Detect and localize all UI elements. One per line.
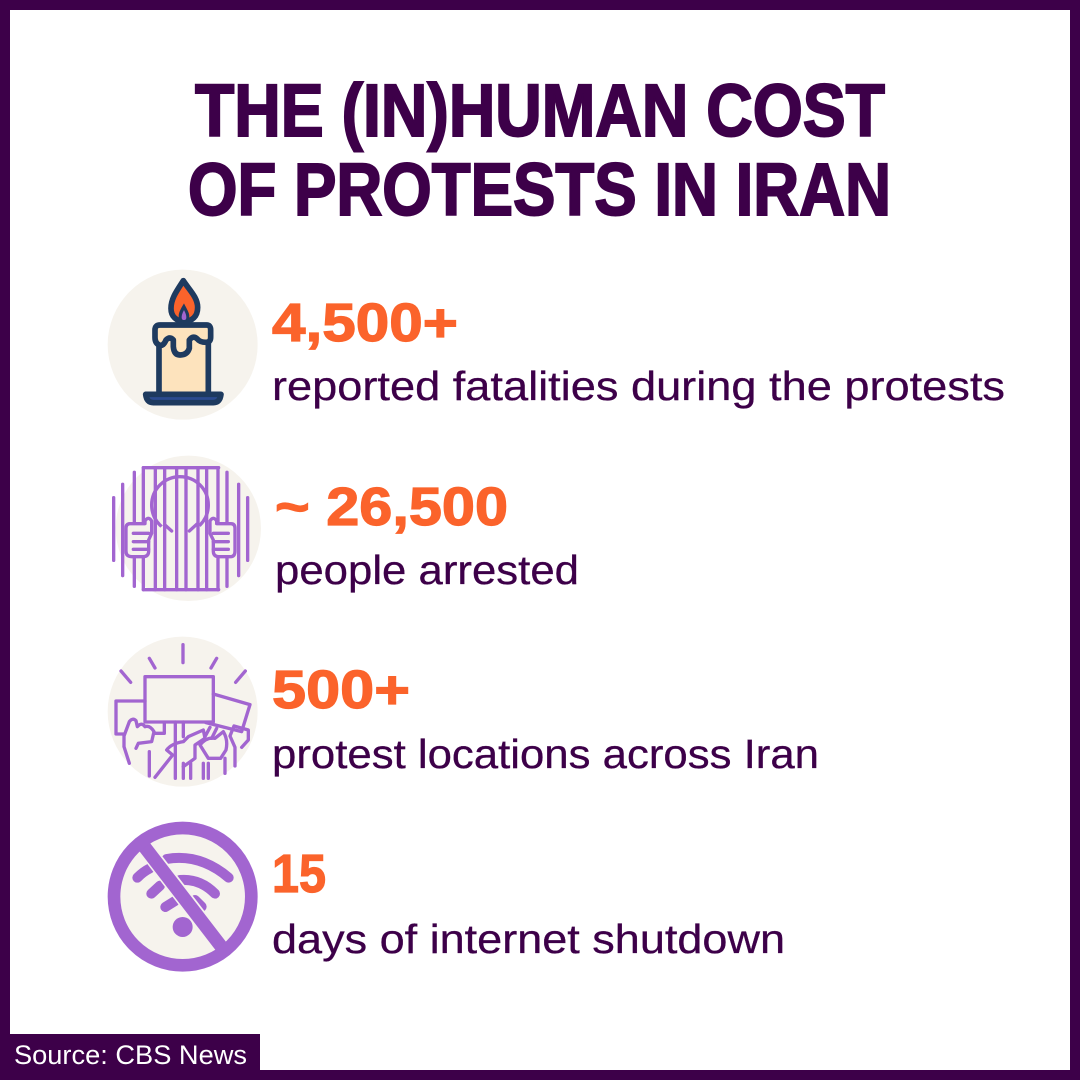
stat: internet shutdown: 15 — [272, 844, 326, 904]
stat: arrests — [275, 477, 579, 593]
icon: no wifi — [114, 828, 251, 965]
title: OF PROTESTS IN IRAN — [188, 148, 891, 231]
stat: protest locations: 500+ — [272, 660, 410, 720]
source label: Source: CBS News — [14, 1040, 247, 1070]
stat: protest locations — [272, 660, 819, 777]
stat: fatalities: 4,500+ — [272, 293, 458, 353]
stat: internet shutdown: days of internet shutdown — [272, 916, 785, 962]
stat: arrests: people arrested — [275, 547, 579, 593]
icon: protest signs — [108, 637, 258, 787]
stat: internet shutdown — [272, 844, 785, 962]
icon: candle — [108, 270, 258, 420]
stat: protest locations: protest locations across Iran — [272, 731, 819, 777]
icon: prison bars — [114, 456, 261, 601]
icon: left fist — [126, 518, 152, 557]
title: THE (IN)HUMAN COST — [195, 69, 885, 152]
icon: right fist — [210, 518, 235, 557]
title — [188, 69, 891, 231]
stat: fatalities — [272, 293, 1005, 409]
stat: fatalities: reported fatalities during the protests — [272, 363, 1005, 409]
stat: arrests: ~ 26,500 — [275, 477, 508, 537]
